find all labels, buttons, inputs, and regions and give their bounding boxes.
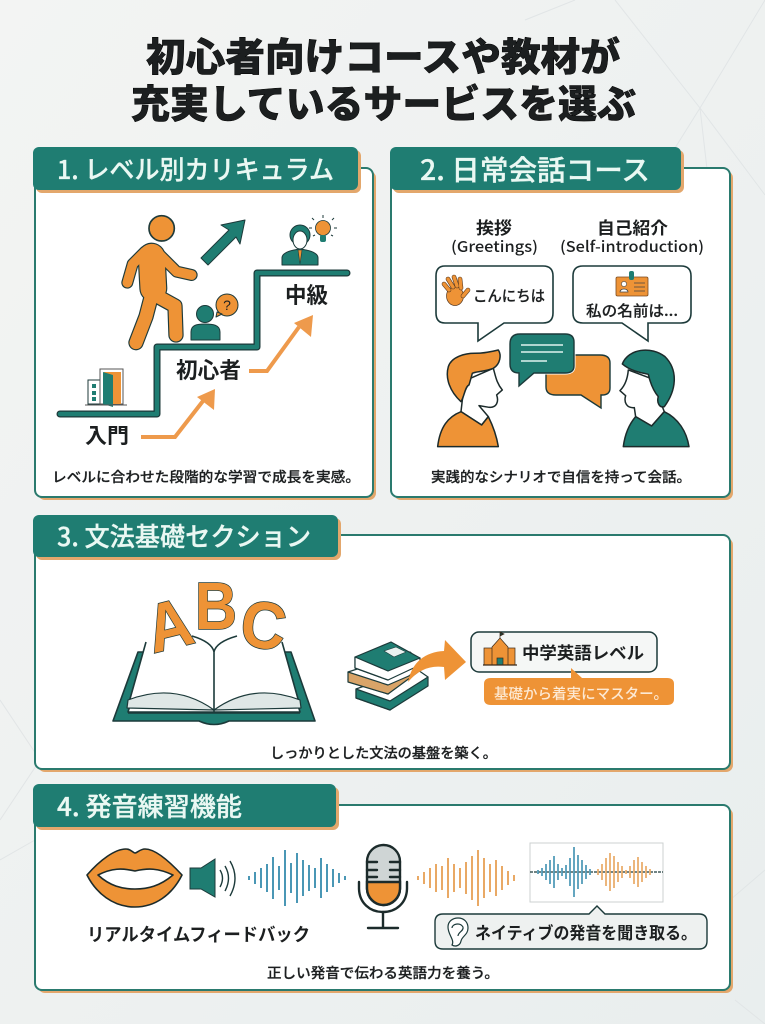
- panel: 1 level curriculum: [33, 147, 376, 500]
- arrow: books to level: [408, 640, 466, 682]
- caption 3: しっかりとした文法の基盤を築く。: [270, 743, 497, 763]
- title: 充実しているサービスを選ぶ: [131, 74, 636, 130]
- label: realtime feedback: リアルタイムフィードバック: [87, 921, 310, 947]
- speech bubble: hello: [436, 266, 553, 341]
- label: entry: 入門: [85, 420, 129, 450]
- caption 1: レベルに合わせた段階的な学習で成長を実感。: [52, 467, 360, 487]
- waveform: blue: [249, 850, 345, 906]
- icon: building with door: [85, 369, 127, 407]
- icon: ear: [448, 918, 468, 946]
- label: self-introduction: (Self-introduction): [560, 236, 704, 257]
- callout: listen to native: ネイティブの発音を聞き取る。: [475, 919, 697, 944]
- title: [131, 27, 636, 130]
- callout: master from basics: 基礎から着実にマスター。: [494, 683, 668, 704]
- label: greetings: [451, 214, 538, 257]
- label: greetings: (Greetings): [451, 236, 538, 257]
- arrow: beginner to intermediate: [249, 315, 313, 371]
- letters: A B C: [138, 569, 291, 668]
- icon: beginner with question: [191, 294, 238, 340]
- label: self-introduction: 自己紹介: [597, 214, 668, 239]
- speech bubble: hello: こんにちは: [473, 285, 545, 306]
- callout: master from basics: [484, 668, 674, 705]
- speech bubble: my name is: 私の名前は...: [586, 300, 678, 321]
- panel: 4 pronunciation: [33, 784, 733, 993]
- speech bubble: my name is: [573, 266, 691, 341]
- label: greetings: 挨拶: [476, 214, 512, 239]
- icon: beginner with question: ?: [223, 297, 231, 313]
- heading: section 2: 2. 日常会話コース: [420, 149, 650, 189]
- stair line: [60, 273, 347, 414]
- icon: school: [483, 632, 517, 665]
- speech bubble: teal: [510, 334, 574, 386]
- panel: 2 daily conversation: [390, 147, 733, 500]
- label: intermediate: 中級: [285, 278, 328, 310]
- callout: junior high level: 中学英語レベル: [522, 639, 644, 664]
- icon: stack of books: [348, 642, 428, 710]
- icon: microphone: [359, 845, 407, 928]
- arrow: entry to beginner: [141, 389, 215, 437]
- heading: section 3: 3. 文法基礎セクション: [57, 517, 311, 554]
- heading: section 2: [390, 147, 684, 193]
- icon: teal up arrow: [201, 220, 245, 265]
- title: 初心者向けコースや教材が: [146, 27, 620, 83]
- icon: walking person: [127, 216, 192, 343]
- label: beginner: 初心者: [176, 353, 241, 385]
- letters: A B C: C: [236, 585, 291, 665]
- chart: waveform comparison: [530, 843, 663, 902]
- speech bubble: orange: [546, 355, 610, 408]
- heading: section 4: [33, 784, 339, 830]
- icon: person orange: [438, 350, 502, 447]
- label: self-introduction: [560, 214, 704, 257]
- caption 4: 正しい発音で伝わる英語力を養う。: [267, 963, 499, 983]
- caption 2: 実践的なシナリオで自信を持って会話。: [431, 467, 691, 487]
- icon: name badge: [616, 271, 648, 296]
- heading: section 1: 1. レベル別カリキュラム: [57, 150, 334, 187]
- waveform: orange: [418, 850, 514, 906]
- icon: person teal: [620, 350, 689, 447]
- icon: expert with light bulb: [282, 215, 337, 265]
- heading: section 4: 4. 発音練習機能: [57, 787, 242, 824]
- callout: listen to native: [435, 906, 707, 949]
- callout: junior high level: [471, 632, 657, 672]
- letters: A B C: A: [138, 583, 200, 668]
- icon: speaker: [190, 859, 235, 897]
- icon: open book: [113, 636, 315, 724]
- icon: waving hand: [444, 277, 468, 306]
- icon: lips: [87, 849, 182, 907]
- letters: A B C: B: [195, 569, 237, 644]
- panel: 3 grammar: [33, 515, 733, 772]
